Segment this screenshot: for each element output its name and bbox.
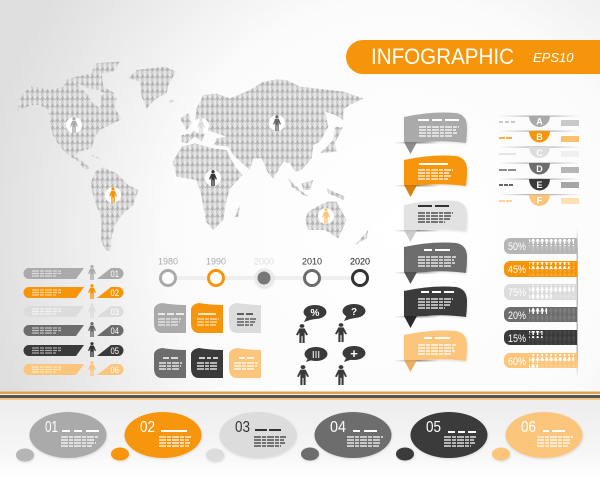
bubble 3 <box>394 200 467 242</box>
bar 50% <box>504 238 577 254</box>
title: INFOGRAPHIC <box>371 44 514 69</box>
bar 75%: 75% <box>508 287 526 299</box>
item A: A <box>536 116 543 126</box>
panel: numbered list <box>24 265 124 376</box>
map marker: Europe <box>193 118 209 134</box>
oval 04: 04 <box>330 419 346 436</box>
row 03: 03 <box>110 307 119 317</box>
map: South America <box>91 167 138 252</box>
person with percent bubble: % <box>311 308 320 319</box>
map: Greenland <box>128 67 176 108</box>
divider stripes <box>0 392 600 400</box>
bubble 1 <box>394 112 467 154</box>
bar 45%: 45% <box>508 264 526 276</box>
bar 15% <box>504 330 577 345</box>
bubble 5 <box>394 286 467 328</box>
2020 <box>350 256 370 286</box>
bar 45% <box>504 261 577 277</box>
row 04: 04 <box>110 326 119 336</box>
2010 <box>302 256 322 286</box>
oval 06: 06 <box>521 419 536 436</box>
panel: A-F list <box>499 116 580 206</box>
oval 02: 02 <box>140 419 155 436</box>
item F: F <box>537 196 543 206</box>
oval 02 <box>111 412 202 460</box>
panel: bottom band <box>0 400 600 479</box>
oval 01: 01 <box>45 419 58 436</box>
person with exclamation bubble: III <box>312 350 320 361</box>
item B: B <box>536 132 543 142</box>
1980: 1980 <box>158 256 178 266</box>
note 2 <box>191 303 223 333</box>
note 1 <box>154 303 186 333</box>
panel: percentage bars <box>504 228 578 378</box>
panel: oval callouts <box>16 412 582 462</box>
oval 03: 03 <box>235 419 250 436</box>
oval 04 <box>301 412 392 460</box>
map: Eurasia <box>182 79 363 178</box>
item E: E <box>536 180 543 190</box>
2000 <box>254 256 274 286</box>
2010: 2010 <box>302 256 322 266</box>
2020: 2020 <box>350 256 370 266</box>
map marker: Africa <box>205 170 221 186</box>
item D: D <box>536 164 543 174</box>
bar 75% <box>504 284 577 300</box>
1990: 1990 <box>206 256 226 266</box>
map: Arctic islands <box>65 62 120 97</box>
map marker: Australia <box>318 208 334 224</box>
row 01: 01 <box>110 269 119 279</box>
row 02: 02 <box>110 288 119 298</box>
row 06: 06 <box>110 365 119 375</box>
bubble 4 <box>394 242 467 284</box>
map marker: North America <box>66 117 82 133</box>
note 4 <box>154 348 186 378</box>
bar 20%: 20% <box>508 310 526 322</box>
oval 05 <box>396 412 488 460</box>
bar 15%: 15% <box>508 333 526 345</box>
world map <box>17 62 368 252</box>
panel: speech bubbles <box>394 112 467 372</box>
bar 50%: 50% <box>508 241 526 253</box>
person with question bubble: ? <box>351 307 357 318</box>
note 5 <box>191 348 223 378</box>
row 05: 05 <box>110 346 119 356</box>
bubble 2 <box>394 156 467 197</box>
note 3 <box>229 303 261 333</box>
map marker: South America <box>105 187 121 203</box>
map: Africa <box>173 143 243 230</box>
subtitle: EPS10 <box>533 50 574 65</box>
map: Australia <box>305 202 347 238</box>
person with plus bubble: + <box>350 346 358 361</box>
oval 05: 05 <box>426 419 441 436</box>
timeline <box>158 256 370 286</box>
map: North America <box>17 80 122 170</box>
panel: square notes <box>154 303 261 378</box>
title banner <box>346 40 600 74</box>
note 6 <box>229 348 261 378</box>
oval 06 <box>492 412 582 460</box>
map: islands <box>90 100 368 245</box>
map marker: Asia <box>269 115 285 131</box>
item C: C <box>536 148 543 158</box>
1980 <box>158 256 178 286</box>
1990 <box>206 256 226 286</box>
bar 20% <box>504 307 577 322</box>
bubble 6 <box>394 330 467 372</box>
2000: 2000 <box>254 256 274 266</box>
oval 03 <box>206 412 296 462</box>
bar 60%: 60% <box>508 356 526 368</box>
panel: people talking <box>296 304 366 385</box>
bar 60% <box>504 353 577 368</box>
oval 01 <box>16 412 106 462</box>
